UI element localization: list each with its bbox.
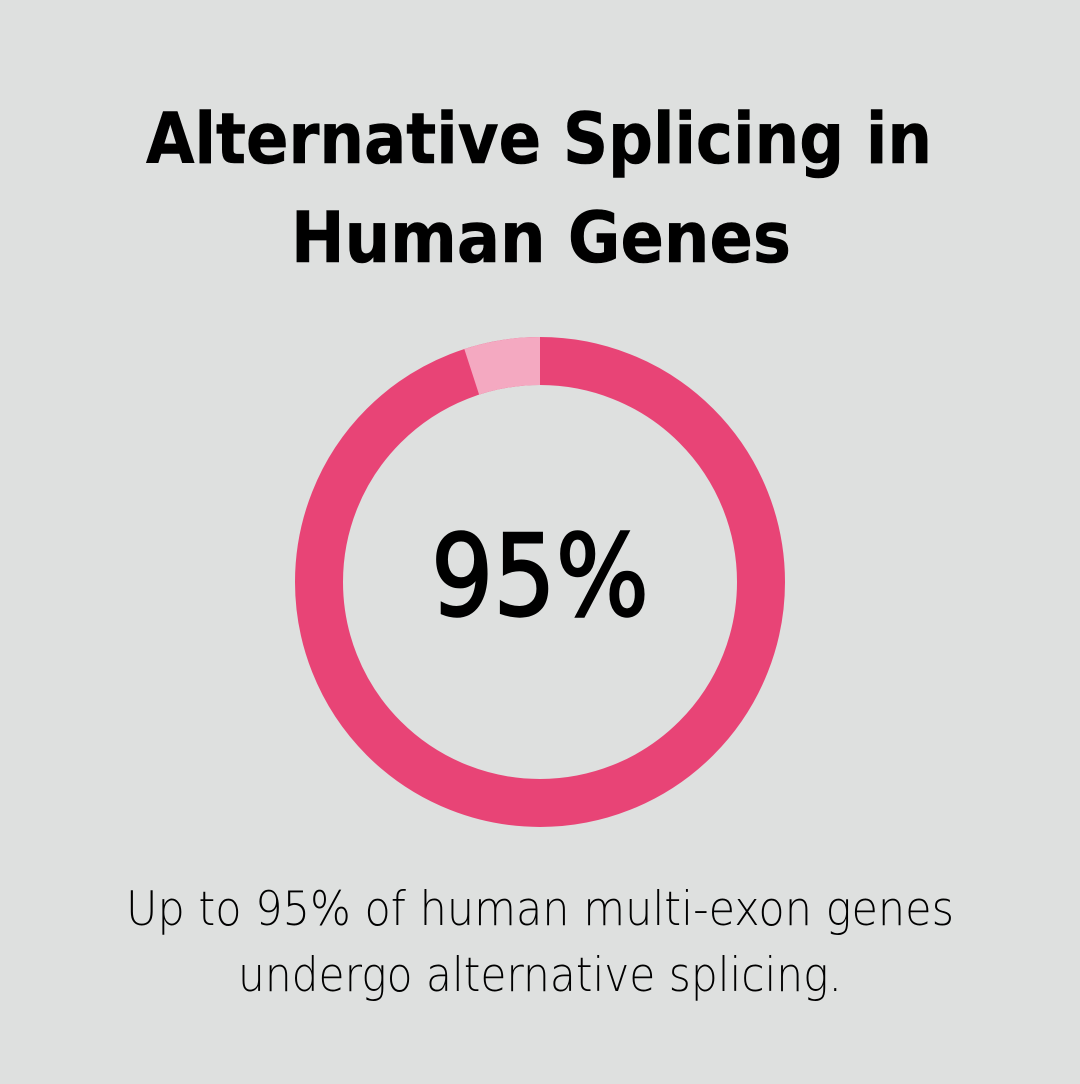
title: Alternative Splicing in bbox=[146, 98, 932, 180]
caption: Up to 95% of human multi-exon genes bbox=[126, 882, 954, 937]
title: Human Genes bbox=[291, 197, 791, 279]
caption: undergo alternative splicing. bbox=[238, 948, 842, 1003]
title bbox=[146, 98, 932, 279]
donut chart: 95 percent bbox=[319, 337, 761, 803]
center value: 95% bbox=[431, 512, 649, 642]
caption bbox=[126, 882, 954, 1003]
